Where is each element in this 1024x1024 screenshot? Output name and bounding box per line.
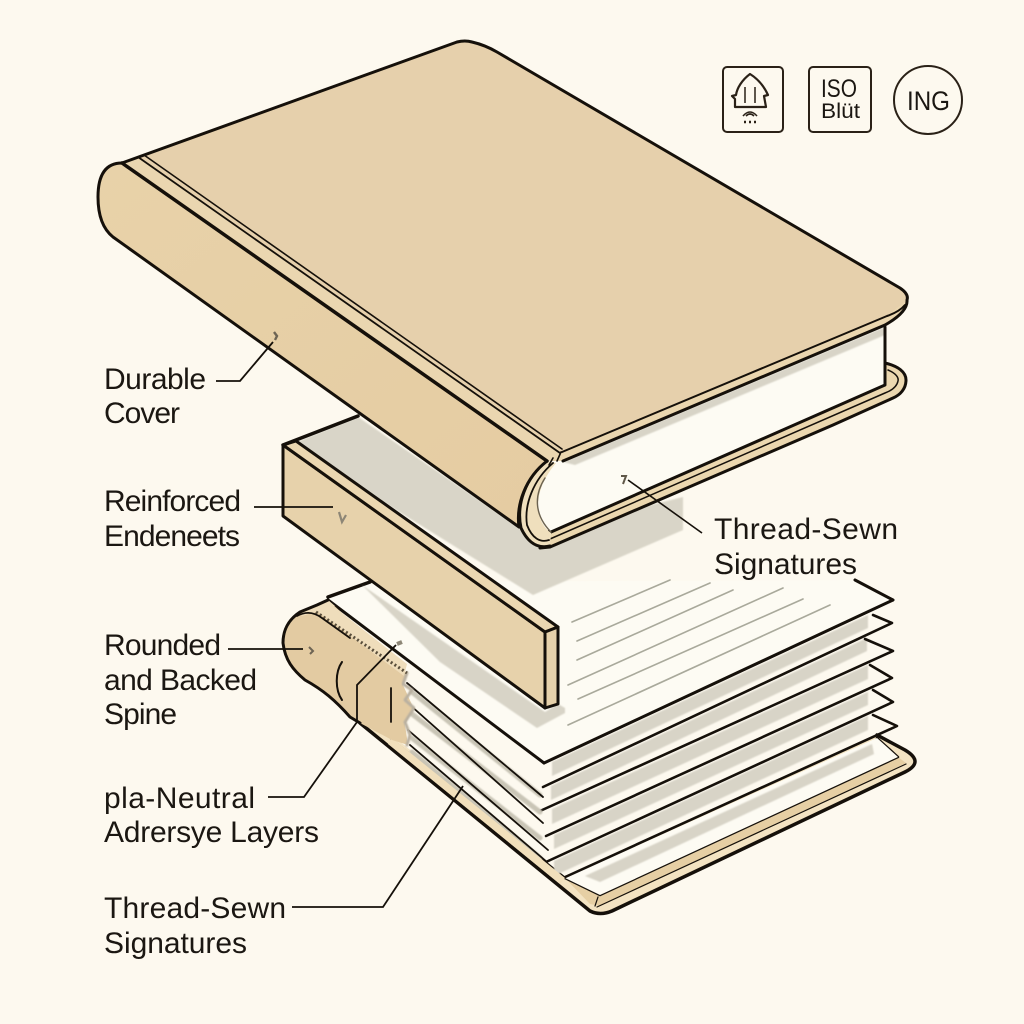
label: thread-sewn signatures lower: Thread-Sewn <box>104 892 286 925</box>
label: reinforced endsheets: Endeneets <box>104 520 240 553</box>
label: durable cover: Cover <box>104 397 180 430</box>
top signature page <box>328 580 893 763</box>
durable cover: spine <box>98 163 547 527</box>
book: lower cover edge <box>540 363 906 548</box>
leader: thread-sewn signatures lower <box>292 786 463 907</box>
leader: reinforced endsheets <box>254 507 346 522</box>
label: rounded and backed spine: Rounded <box>104 629 221 662</box>
label: thread-sewn signatures lower: Signatures <box>104 927 247 960</box>
leader: adhesive layers <box>268 642 402 797</box>
lower cover board <box>360 723 915 914</box>
book: spine front curve <box>520 461 556 547</box>
badge: ING: ING <box>907 86 950 116</box>
badge: ISO: ISO <box>821 75 857 103</box>
leader: rounded and backed spine <box>228 647 313 654</box>
leader: durable cover <box>216 332 277 381</box>
label: durable cover: Durable <box>104 363 206 396</box>
signature shadows <box>551 615 874 882</box>
bottom page <box>565 738 898 895</box>
printed text lines <box>568 580 830 725</box>
exploded text block with lower cover <box>98 41 915 914</box>
label: thread-sewn signatures upper: Thread-Sewn <box>714 513 898 546</box>
rounded and backed spine <box>283 600 565 884</box>
fore-edge shadows <box>412 692 540 858</box>
durable cover: front board <box>122 41 907 465</box>
label: adhesive layers: pla-Neutral <box>104 782 255 815</box>
signature edges <box>540 580 897 878</box>
book: page block <box>537 327 885 533</box>
badge: ISO: Blüt <box>821 100 860 123</box>
book cast shadow <box>297 417 683 595</box>
reinforced endsheet board <box>283 416 558 708</box>
badge: ING <box>894 66 962 134</box>
label: reinforced endsheets: Reinforced <box>104 485 241 518</box>
label: rounded and backed spine: Spine <box>104 698 177 731</box>
label: thread-sewn signatures upper: Signatures <box>714 548 857 581</box>
badge: ISO <box>809 67 871 132</box>
label: rounded and backed spine: and Backed <box>104 664 257 697</box>
fore-edge sheet lines <box>407 683 548 862</box>
leader: thread-sewn signatures upper <box>621 476 702 533</box>
label: adhesive layers: Adrersye Layers <box>104 816 319 849</box>
endsheet shadow on page <box>362 585 565 728</box>
badge: recycling house icon <box>723 67 783 132</box>
